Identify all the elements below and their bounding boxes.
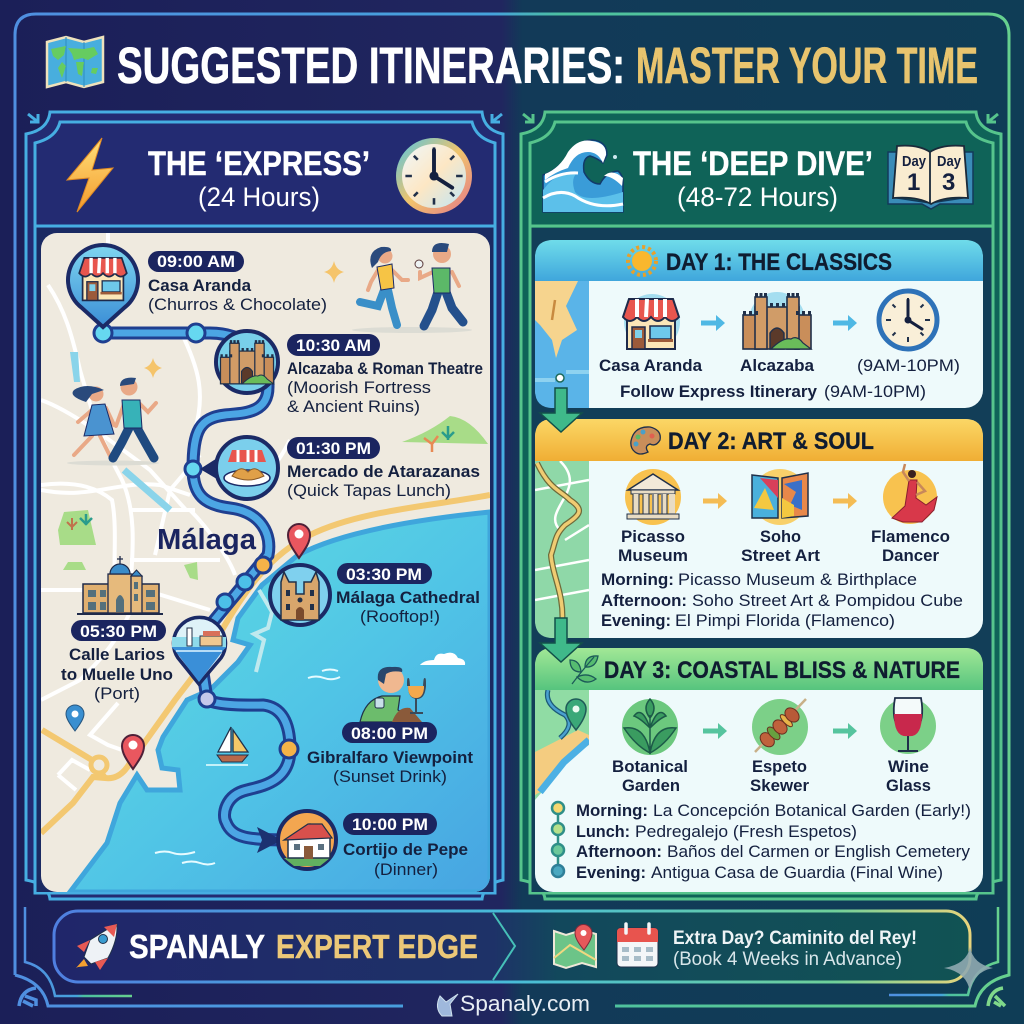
city label: Málaga xyxy=(157,524,257,556)
labels: day 2 xyxy=(618,527,950,565)
card: day 3 xyxy=(535,648,983,892)
labels: day 2: Flamenco xyxy=(871,527,950,546)
panel: express xyxy=(26,112,503,899)
note: day 1: Follow Express Itinerary xyxy=(620,382,818,401)
schedule: day 2 xyxy=(601,570,963,630)
time pill xyxy=(287,437,380,459)
woman xyxy=(360,247,408,325)
card header: day 2 xyxy=(535,419,983,461)
stop label xyxy=(287,359,483,416)
card title: DAY 2: ART & SOUL xyxy=(668,428,874,455)
icon: open book: 3 xyxy=(942,169,955,196)
illustration: man with wine xyxy=(360,667,425,722)
medallion: tapas xyxy=(200,437,278,499)
stop label xyxy=(61,645,173,703)
banner title: EXPERT EDGE xyxy=(276,928,478,965)
chevron divider xyxy=(493,913,515,980)
icon: shop xyxy=(623,294,680,350)
illustration: couple walking xyxy=(67,378,159,466)
schedule: day 3: Afternoon: xyxy=(576,842,662,861)
icon: clock xyxy=(879,291,937,349)
icon: leaf xyxy=(570,656,598,684)
card: day 1 xyxy=(535,240,983,408)
icon: alcazaba xyxy=(743,292,811,349)
stop label: Gibralfaro Viewpoint xyxy=(307,748,473,767)
stop label xyxy=(287,462,480,500)
stop: Gibralfaro xyxy=(307,667,473,786)
stop label: (Churros & Chocolate) xyxy=(148,295,327,314)
schedule: day 3: Lunch: xyxy=(576,822,630,841)
sea xyxy=(70,512,490,892)
labels: day 3 xyxy=(612,757,931,795)
green parks xyxy=(402,416,488,444)
time pill xyxy=(148,251,244,272)
icon: open book: 1 xyxy=(907,169,920,196)
schedule: day 3: Pedregalejo (Fresh Espetos) xyxy=(635,822,857,841)
labels: day 3: Glass xyxy=(886,776,931,795)
arrow xyxy=(703,723,727,739)
heading: express: THE ‘EXPRESS’ xyxy=(148,145,370,183)
stop label: (Rooftop!) xyxy=(360,607,440,626)
schedule: day 3: La Concepción Botanical Garden (Early!) xyxy=(653,801,971,820)
banner title xyxy=(129,928,478,965)
icon: museum xyxy=(625,469,681,525)
time pill: 08:00 PM xyxy=(351,724,428,743)
stop label: Calle Larios xyxy=(69,645,165,664)
labels: day 1: (9AM-10PM) xyxy=(857,356,960,375)
icon: palette xyxy=(631,427,660,454)
callout text xyxy=(673,928,917,970)
corner arrow right xyxy=(988,988,1005,1006)
yellow coastal road xyxy=(41,495,490,833)
icon: cloud xyxy=(420,653,465,665)
stop: Mercado xyxy=(200,437,480,500)
schedule: day 3: Baños del Carmen or English Cemetery xyxy=(667,842,970,861)
labels: day 1: Casa Aranda xyxy=(599,356,703,375)
medallion: cathedral xyxy=(270,565,330,625)
time pill: 05:30 PM xyxy=(80,622,157,641)
heading: deep dive: THE ‘DEEP DIVE’ xyxy=(633,145,873,183)
subheading: 48-72 hours: (48-72 Hours) xyxy=(677,182,838,212)
labels: day 1: Alcazaba xyxy=(740,356,815,375)
labels: day 2: Dancer xyxy=(882,546,939,565)
pin: shop xyxy=(68,245,138,327)
labels: day 3: Wine xyxy=(888,757,929,776)
icon: spanaly logo xyxy=(437,994,458,1016)
medallion: farmhouse xyxy=(278,811,336,869)
icon: rocket xyxy=(76,924,117,970)
schedule: day 3: Morning: xyxy=(576,801,648,820)
icon: sailboat xyxy=(206,727,248,765)
footer text: Spanaly.com xyxy=(460,991,590,1016)
card header: day 3 xyxy=(535,648,983,690)
illustration: couple running xyxy=(352,243,472,333)
map strip: day 2 xyxy=(535,461,589,638)
stop label xyxy=(307,748,473,786)
stop label: Cortijo de Pepe xyxy=(343,840,468,859)
callout text: Extra Day? Caminito del Rey! xyxy=(673,928,917,949)
decorations: sparkles and map markers xyxy=(66,261,344,769)
icon: sun xyxy=(628,247,656,275)
medallion: castle xyxy=(216,331,278,393)
canal xyxy=(70,352,80,382)
icon: open book: Day xyxy=(902,153,927,170)
schedule: day 2: Evening: xyxy=(601,611,671,630)
corner arrows xyxy=(28,114,502,122)
title: SUGGESTED ITINERARIES: xyxy=(117,37,625,94)
labels: day 2: Picasso xyxy=(621,527,685,546)
schedule: day 2: El Pimpi Florida (Flamenco) xyxy=(675,611,895,630)
arrow xyxy=(833,723,857,739)
stop label xyxy=(336,588,480,626)
stop label: (Port) xyxy=(94,684,140,703)
schedule: day 2: Picasso Museum & Birthplace xyxy=(678,570,917,589)
banner: expert edge xyxy=(54,911,970,982)
labels: day 2: Soho xyxy=(760,527,801,546)
panel frame: deep dive xyxy=(521,112,1001,899)
arrow xyxy=(701,315,725,331)
note: day 1: (9AM-10PM) xyxy=(824,382,926,401)
schedule: day 3: Evening: xyxy=(576,863,646,882)
icon: wine glass xyxy=(880,698,936,754)
stop label: (Moorish Fortress xyxy=(287,378,431,397)
stop label xyxy=(148,276,327,314)
map xyxy=(41,233,490,892)
panel: deep dive xyxy=(521,112,1001,899)
roads xyxy=(41,233,290,790)
timeline dots xyxy=(552,802,564,877)
stop: Cathedral xyxy=(270,563,480,626)
time pill: 03:30 PM xyxy=(346,565,422,584)
schedule: day 2: Morning: xyxy=(601,570,674,589)
card title: DAY 1: THE CLASSICS xyxy=(666,249,892,276)
card title: DAY 3: COASTAL BLISS & NATURE xyxy=(604,657,960,684)
stop: Calle Larios xyxy=(61,556,226,703)
icon: flamenco dancer xyxy=(883,464,937,524)
time pill xyxy=(343,813,437,835)
port piers xyxy=(254,590,272,672)
stop label: Málaga Cathedral xyxy=(336,588,480,607)
arrow: day 1 to day 2 xyxy=(540,388,582,432)
labels: day 3: Botanical xyxy=(612,757,688,776)
schedule: day 3 xyxy=(576,801,971,882)
arrow xyxy=(833,315,857,331)
time pill: 10:30 AM xyxy=(296,336,371,355)
banner title: SPANALY xyxy=(129,928,265,965)
arrow xyxy=(833,493,857,509)
time pill xyxy=(287,334,380,356)
icon: open book: Day xyxy=(937,153,962,170)
icon: cathedral building xyxy=(77,556,163,614)
stop: Cortijo xyxy=(278,811,468,879)
route nodes xyxy=(94,324,298,758)
icon: skewer xyxy=(752,699,808,755)
footer xyxy=(437,991,590,1016)
route xyxy=(103,333,290,840)
schedule: day 2: Soho Street Art & Pompidou Cube xyxy=(692,591,963,610)
labels: day 3: Skewer xyxy=(750,776,809,795)
stop label: Casa Aranda xyxy=(148,276,252,295)
card: day 2 xyxy=(535,419,983,638)
icon: world map xyxy=(47,37,103,87)
icon: soho street art xyxy=(752,469,808,525)
subheading: 24 hours: (24 Hours) xyxy=(198,182,320,212)
map strip: day 3 xyxy=(535,690,589,800)
decoration: sparkle xyxy=(944,947,993,992)
time pill: 09:00 AM xyxy=(157,252,235,271)
panel frame: express xyxy=(26,112,503,899)
card header: day 1 xyxy=(535,240,983,281)
man xyxy=(415,243,463,326)
route arrowhead xyxy=(257,827,282,853)
schedule: day 3: Antigua Casa de Guardia (Final Wine) xyxy=(651,863,943,882)
note: day 1 xyxy=(620,382,926,401)
stop label: & Ancient Ruins) xyxy=(287,397,420,416)
arrow: day 2 to day 3 xyxy=(540,618,582,662)
icon: open book xyxy=(888,146,973,209)
stop label: to Muelle Uno xyxy=(61,665,173,684)
time pill: 10:00 PM xyxy=(352,815,428,834)
icon: calendar xyxy=(617,924,658,967)
labels: day 2: Street Art xyxy=(741,546,820,565)
pin: port xyxy=(172,617,226,684)
labels: day 3: Garden xyxy=(622,776,680,795)
stop: Alcazaba xyxy=(216,331,483,416)
icon: wave xyxy=(543,140,623,212)
map strip: day 1 xyxy=(535,281,589,408)
labels: day 3: Espeto xyxy=(752,757,807,776)
stop: Casa Aranda xyxy=(68,245,327,327)
stop label: Alcazaba & Roman Theatre xyxy=(287,359,483,378)
sea ripples xyxy=(155,670,340,864)
stop label: Mercado de Atarazanas xyxy=(287,462,480,481)
callout text: (Book 4 Weeks in Advance) xyxy=(673,949,902,970)
icon: lightning bolt xyxy=(67,138,113,212)
stop label: (Quick Tapas Lunch) xyxy=(287,481,451,500)
stop label xyxy=(343,840,468,879)
corner arrow left xyxy=(19,988,36,1006)
arrow xyxy=(703,493,727,509)
icon: clock xyxy=(396,138,472,214)
labels: day 1 xyxy=(599,356,960,375)
labels: day 2: Museum xyxy=(618,546,688,565)
stop label: (Dinner) xyxy=(374,860,438,879)
schedule: day 2: Afternoon: xyxy=(601,591,687,610)
time pill: 01:30 PM xyxy=(296,439,371,458)
stop label: (Sunset Drink) xyxy=(333,767,447,786)
icon: botanical xyxy=(622,699,678,755)
icon: folded map xyxy=(554,924,596,968)
